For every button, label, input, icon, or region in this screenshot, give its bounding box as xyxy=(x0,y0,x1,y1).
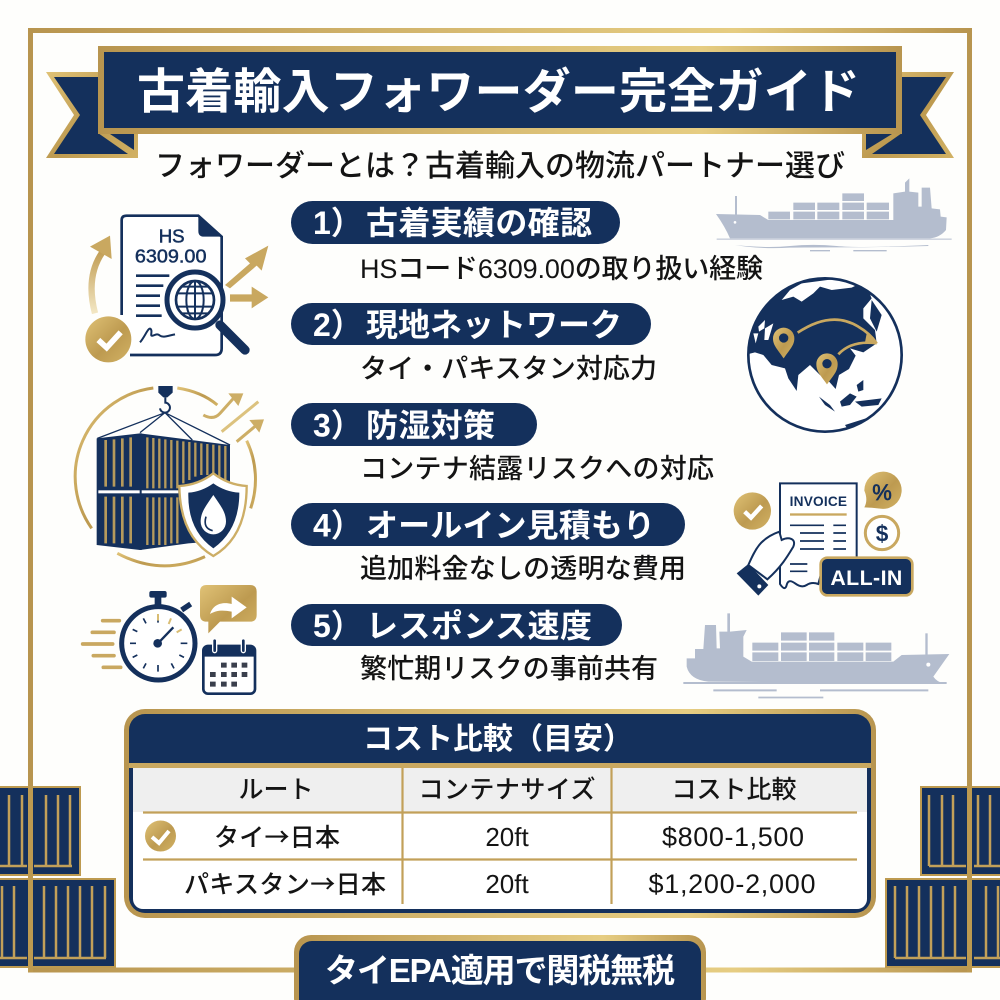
item 2: 2） xyxy=(313,307,363,343)
icon: percent bubble xyxy=(864,472,902,509)
item 4: 追加料金なしの透明な費用 xyxy=(360,554,686,584)
callout: Thai EPA xyxy=(294,935,706,1000)
item 4 xyxy=(291,503,686,584)
item 1: 1） xyxy=(313,205,363,241)
right container stack xyxy=(886,786,1000,972)
icon: all-in invoice: INVOICE xyxy=(790,494,847,509)
icon: percent bubble: % xyxy=(872,480,892,505)
table column headers: コンテナサイズ xyxy=(418,776,596,804)
item 2: 現地ネットワーク xyxy=(366,307,622,343)
row: Thailand: $800-1,500 xyxy=(662,822,804,852)
item 1: HSコード6309.00の取り扱い経験 xyxy=(360,254,763,284)
item 1 xyxy=(291,201,763,284)
icon: condensation arrows xyxy=(203,393,264,442)
title ribbon xyxy=(46,46,954,158)
row: Thailand xyxy=(145,818,804,854)
item 5: レスポンス速度 xyxy=(366,608,592,644)
item 3: 3） xyxy=(313,408,363,444)
icon: message bubble xyxy=(200,585,257,633)
table column headers: ルート xyxy=(238,776,314,804)
icon: document with magnifier: HS xyxy=(159,225,185,246)
row: Pakistan xyxy=(184,865,816,901)
all-in badge: ALL-IN xyxy=(830,566,902,590)
item 4: 4） xyxy=(313,508,363,544)
table column headers: コスト比較 xyxy=(671,776,797,804)
icon: cargo ship bottom xyxy=(683,613,949,698)
icon: check badge xyxy=(734,492,771,530)
subtitle: フォワーダーとは？古着輸入の物流パートナー選び xyxy=(155,150,845,183)
row: Pakistan: $1,200-2,000 xyxy=(648,869,816,899)
icon: dollar coin: $ xyxy=(876,520,889,546)
item 5 xyxy=(291,604,658,684)
icon: check badge xyxy=(85,316,131,362)
icon: globe with route pins xyxy=(745,275,902,432)
icon: document with magnifier: 6309.00 xyxy=(135,245,206,266)
item 2 xyxy=(291,303,657,384)
item 3: コンテナ結露リスクへの対応 xyxy=(360,454,714,484)
icon: container with shield xyxy=(75,386,264,566)
item 3 xyxy=(291,403,714,484)
callout: Thai EPA: タイEPA適用で関税無税 xyxy=(325,952,675,989)
panel: cost comparison table xyxy=(124,709,876,918)
row: Pakistan: パキスタン→日本 xyxy=(184,865,386,901)
title text: 古着輸入フォワーダー完全ガイド xyxy=(137,66,860,119)
icon: pin Pakistan xyxy=(773,328,794,358)
item 4: オールイン見積もり xyxy=(366,508,655,544)
icon: all-in invoice xyxy=(734,472,912,596)
item 3: 防湿対策 xyxy=(366,408,495,444)
table heading: コスト比較（目安） xyxy=(363,723,633,756)
item 1: 古着実績の確認 xyxy=(366,205,592,241)
all-in badge xyxy=(821,558,912,595)
icon: calendar xyxy=(203,641,255,694)
icon: pin Thailand xyxy=(816,353,838,384)
row: Pakistan: 20ft xyxy=(485,869,529,899)
icon: curved gold arrow xyxy=(92,250,104,313)
item 5: 5） xyxy=(313,608,363,644)
icon: document with magnifier xyxy=(85,216,268,362)
icon: right arrows xyxy=(225,246,268,308)
row: Thailand: 20ft xyxy=(485,822,529,852)
icon: dollar coin xyxy=(865,516,899,550)
icon: hand xyxy=(737,532,794,596)
item 2: タイ・パキスタン対応力 xyxy=(360,354,657,384)
left container stack xyxy=(0,786,115,972)
icon: stopwatch, message, calendar xyxy=(83,585,257,694)
row: Thailand: タイ→日本 xyxy=(214,818,340,854)
icon: cargo ship top xyxy=(716,178,952,251)
table column headers xyxy=(238,776,797,804)
item 5: 繁忙期リスクの事前共有 xyxy=(360,654,658,684)
